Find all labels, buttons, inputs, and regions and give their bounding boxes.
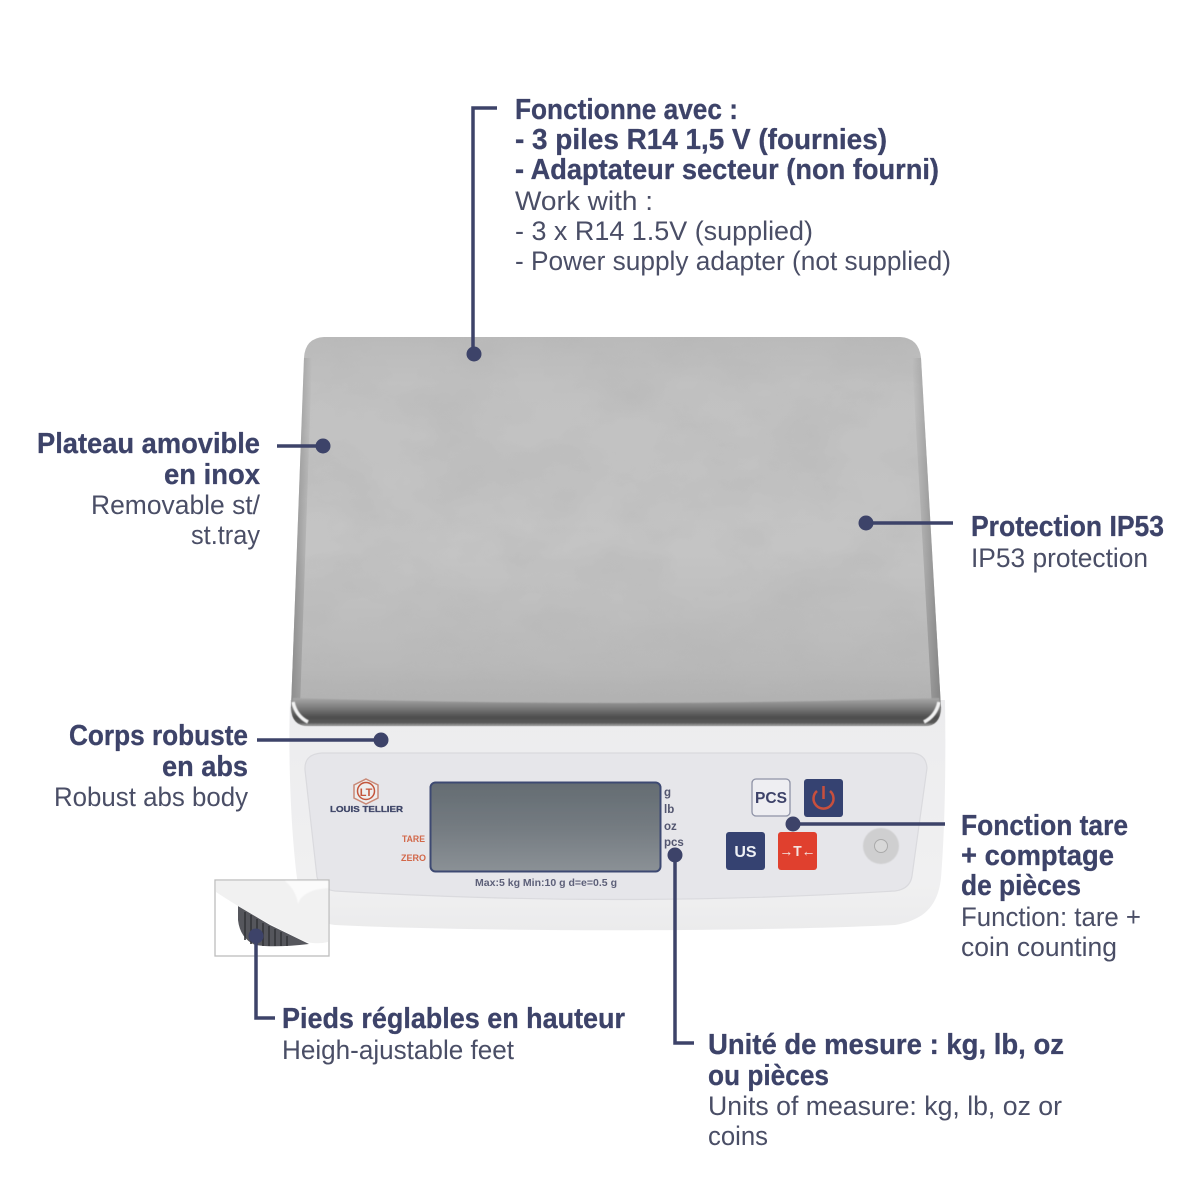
tare text: Function: tare + bbox=[961, 902, 1141, 932]
English power text bbox=[515, 186, 951, 276]
IP53 text: Protection IP53 bbox=[971, 511, 1164, 543]
body text: en abs bbox=[162, 751, 248, 783]
feet text: Pieds réglables en hauteur bbox=[282, 1003, 625, 1035]
leader line: tare bbox=[786, 816, 945, 832]
LCD display bbox=[430, 782, 660, 872]
PCS button bbox=[752, 779, 790, 816]
leader line: IP53 bbox=[858, 516, 953, 530]
tray text: st.tray bbox=[191, 520, 260, 550]
unit labels: pcs bbox=[664, 837, 684, 849]
tare button bbox=[778, 832, 817, 870]
US button bbox=[726, 832, 765, 870]
feet text: Heigh-ajustable feet bbox=[282, 1035, 514, 1065]
units text: Units of measure: kg, lb, oz or bbox=[708, 1091, 1062, 1121]
tare button: →T← bbox=[780, 843, 816, 860]
tray text bbox=[37, 428, 260, 550]
leader line: units bbox=[668, 848, 694, 1043]
logo: Louis Tellier: LT bbox=[360, 787, 373, 799]
leader line: tray bbox=[277, 438, 330, 454]
units text: ou pièces bbox=[708, 1060, 829, 1092]
leader line: power bbox=[466, 108, 497, 362]
scale body bbox=[289, 700, 945, 930]
IP53 text bbox=[971, 511, 1164, 573]
tray text: Plateau amovible bbox=[37, 428, 260, 460]
US button: US bbox=[734, 844, 757, 861]
unit labels: lb bbox=[664, 804, 674, 816]
tare text: de pièces bbox=[961, 870, 1081, 902]
leader line: body bbox=[257, 732, 388, 748]
tare text: Fonction tare bbox=[961, 810, 1128, 842]
tray text: Removable st/ bbox=[91, 490, 260, 520]
French power text: Fonctionne avec : bbox=[515, 94, 738, 126]
French power text: - Adaptateur secteur (non fourni) bbox=[515, 154, 939, 186]
units text: Unité de mesure : kg, lb, oz bbox=[708, 1029, 1064, 1061]
callout: body bbox=[54, 720, 388, 812]
scale photograph bbox=[289, 337, 945, 930]
tare text bbox=[961, 810, 1141, 962]
tare text: + comptage bbox=[961, 840, 1114, 872]
unit labels bbox=[664, 787, 684, 849]
stainless steel tray bbox=[291, 337, 941, 726]
English power text: - Power supply adapter (not supplied) bbox=[515, 246, 951, 276]
callout: adjustable feet bbox=[248, 928, 625, 1065]
body text: Robust abs body bbox=[54, 782, 248, 812]
PCS button: PCS bbox=[755, 790, 787, 807]
body text: Corps robuste bbox=[69, 720, 248, 752]
tare and zero labels bbox=[401, 834, 426, 863]
tare and zero labels: ZERO bbox=[401, 853, 426, 863]
French power text: - 3 piles R14 1,5 V (fournies) bbox=[515, 124, 887, 156]
logo: Louis Tellier: LOUIS TELLIER bbox=[330, 804, 403, 814]
unit labels: oz bbox=[664, 821, 677, 833]
control panel bbox=[305, 753, 927, 900]
callout: units bbox=[668, 848, 1064, 1151]
power button bbox=[804, 779, 843, 817]
units text bbox=[708, 1029, 1064, 1151]
English power text: - 3 x R14 1.5V (supplied) bbox=[515, 216, 813, 246]
tare and zero labels: TARE bbox=[402, 834, 425, 844]
callout: tray bbox=[37, 428, 330, 550]
English power text: Work with : bbox=[515, 186, 653, 216]
leader line: feet bbox=[248, 928, 275, 1018]
capacity specification: Max:5 kg Min:10 g d=e=0.5 g bbox=[475, 878, 617, 889]
callout: IP53 bbox=[858, 511, 1164, 573]
French power text bbox=[515, 94, 939, 186]
IP53 text: IP53 protection bbox=[971, 543, 1148, 573]
units text: coins bbox=[708, 1121, 768, 1151]
feet text bbox=[282, 1003, 625, 1065]
callout: power bbox=[466, 94, 951, 362]
foot detail inset bbox=[215, 880, 329, 956]
callout: tare and count bbox=[786, 810, 1141, 962]
tray text: en inox bbox=[164, 459, 260, 491]
tare text: coin counting bbox=[961, 932, 1117, 962]
logo: Louis Tellier bbox=[330, 779, 403, 814]
body text bbox=[54, 720, 248, 812]
level bubble bbox=[863, 828, 899, 864]
unit labels: g bbox=[664, 787, 671, 799]
